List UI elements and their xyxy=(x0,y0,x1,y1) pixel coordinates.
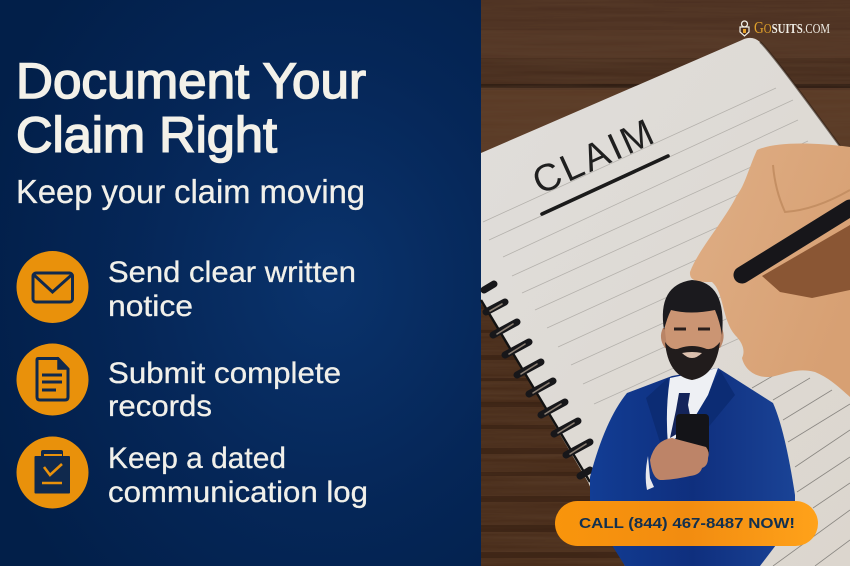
notebook page xyxy=(481,38,850,566)
head xyxy=(665,287,721,380)
shirt xyxy=(667,368,718,445)
hair xyxy=(663,280,723,335)
page shadow edge xyxy=(760,42,850,160)
item: submit records xyxy=(16,344,341,423)
text: send clear written notice: notice xyxy=(108,290,193,323)
finger fold xyxy=(773,165,850,212)
panel: blue text panel xyxy=(0,0,481,566)
pen xyxy=(742,208,850,275)
text: keep a dated communication log: Keep a dated xyxy=(108,442,286,475)
text: send clear written notice xyxy=(108,256,356,323)
subtitle: Keep your claim moving xyxy=(16,173,365,210)
title xyxy=(16,53,366,163)
hand on phone xyxy=(650,438,709,480)
icon: clipboard xyxy=(16,436,88,508)
panel: notebook photo xyxy=(481,0,850,566)
text: submit complete records xyxy=(108,357,341,423)
spiral binding xyxy=(481,284,590,482)
handwritten word: CLAIM: CLAIM xyxy=(526,112,660,203)
beard xyxy=(665,342,720,380)
title: Claim Right xyxy=(16,107,277,163)
icon: envelope xyxy=(16,251,88,323)
tie xyxy=(670,393,692,438)
ruled lines xyxy=(483,88,808,404)
text: submit complete records: Submit complete xyxy=(108,357,341,390)
text: keep a dated communication log xyxy=(108,442,368,509)
title: Document Your xyxy=(16,53,366,109)
text: send clear written notice: Send clear written xyxy=(108,256,356,289)
suit xyxy=(590,368,795,566)
call to action button xyxy=(555,501,818,546)
smile xyxy=(682,352,702,358)
wood desk background xyxy=(481,0,850,566)
phone xyxy=(676,414,709,456)
neck and ears xyxy=(661,328,724,348)
shadow under pen xyxy=(762,225,850,298)
wordmark: GOSUITS.COM xyxy=(754,18,830,37)
underline xyxy=(542,156,668,214)
item: communication log xyxy=(16,436,368,509)
lapels xyxy=(646,370,735,455)
shirt cuff xyxy=(646,456,654,490)
logo xyxy=(740,18,830,37)
item: send notice xyxy=(16,251,356,323)
hand holding pen xyxy=(690,144,850,397)
text: keep a dated communication log: communication log xyxy=(108,476,368,509)
icon: lock shield xyxy=(740,21,749,36)
eyes xyxy=(674,328,710,330)
hand xyxy=(690,144,850,397)
text: submit complete records: records xyxy=(108,390,212,423)
icon: document xyxy=(16,344,88,416)
call to action button: CALL (844) 467-8487 NOW! xyxy=(579,516,795,532)
portrait: man in blue suit with phone xyxy=(590,280,795,566)
